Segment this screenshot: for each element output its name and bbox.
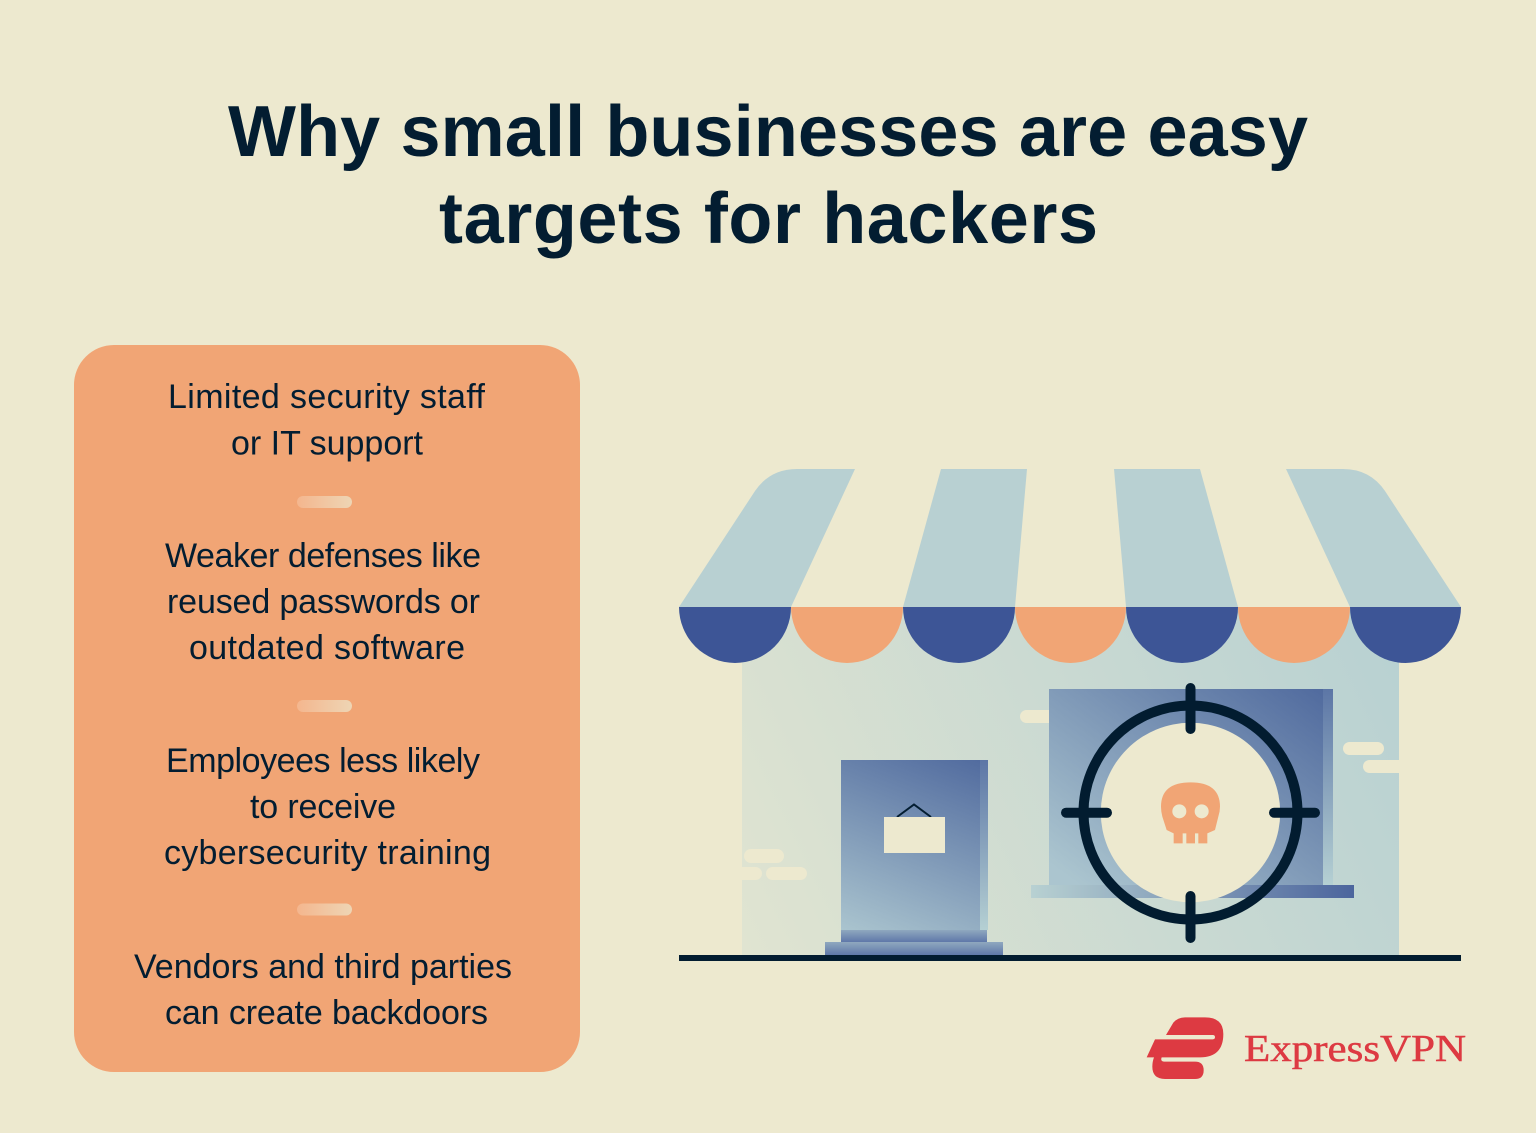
divider pill 1 bbox=[297, 496, 352, 508]
awning scallops bbox=[679, 607, 1461, 663]
reason: vendors and third parties: Vendors and third parties bbox=[134, 948, 512, 986]
door bbox=[825, 760, 1003, 955]
title: Why small businesses are easy bbox=[228, 92, 1308, 172]
reason: employees less likely: to receive bbox=[250, 788, 396, 826]
divider pill 2 bbox=[297, 700, 352, 712]
reason: vendors and third parties bbox=[134, 948, 512, 1032]
title: targets for hackers bbox=[439, 179, 1098, 259]
reason: employees less likely: Employees less likely bbox=[166, 742, 480, 780]
reason: limited security staff: Limited security staff bbox=[168, 378, 486, 416]
crosshair target bbox=[1066, 688, 1315, 938]
door sign bbox=[884, 804, 945, 853]
ground line bbox=[679, 955, 1461, 961]
shop wall bbox=[742, 607, 1399, 955]
divider pill 3 bbox=[297, 904, 352, 916]
window bbox=[1031, 689, 1354, 898]
reason: weaker defenses bbox=[165, 537, 481, 667]
logo: ExpressVPN bbox=[1147, 1017, 1466, 1079]
reason: limited security staff bbox=[168, 378, 486, 462]
panel background bbox=[74, 345, 580, 1072]
panel: reasons list bbox=[74, 345, 580, 1072]
icon: ExpressVPN mark bbox=[1147, 1017, 1223, 1079]
wall bricks bbox=[742, 710, 1399, 880]
reason: weaker defenses: reused passwords or bbox=[167, 583, 480, 621]
reason: weaker defenses: outdated software bbox=[189, 629, 465, 667]
awning stripes bbox=[679, 469, 1461, 607]
reason: employees less likely bbox=[164, 742, 491, 872]
reason: employees less likely: cybersecurity training bbox=[164, 834, 491, 872]
reason: limited security staff: or IT support bbox=[231, 424, 424, 462]
title bbox=[228, 92, 1308, 259]
illustration: storefront bbox=[679, 469, 1461, 961]
reason: vendors and third parties: can create backdoors bbox=[165, 994, 488, 1032]
reason: weaker defenses: Weaker defenses like bbox=[165, 537, 481, 575]
icon: skull bbox=[1161, 782, 1220, 843]
wordmark: ExpressVPN bbox=[1244, 1028, 1466, 1070]
